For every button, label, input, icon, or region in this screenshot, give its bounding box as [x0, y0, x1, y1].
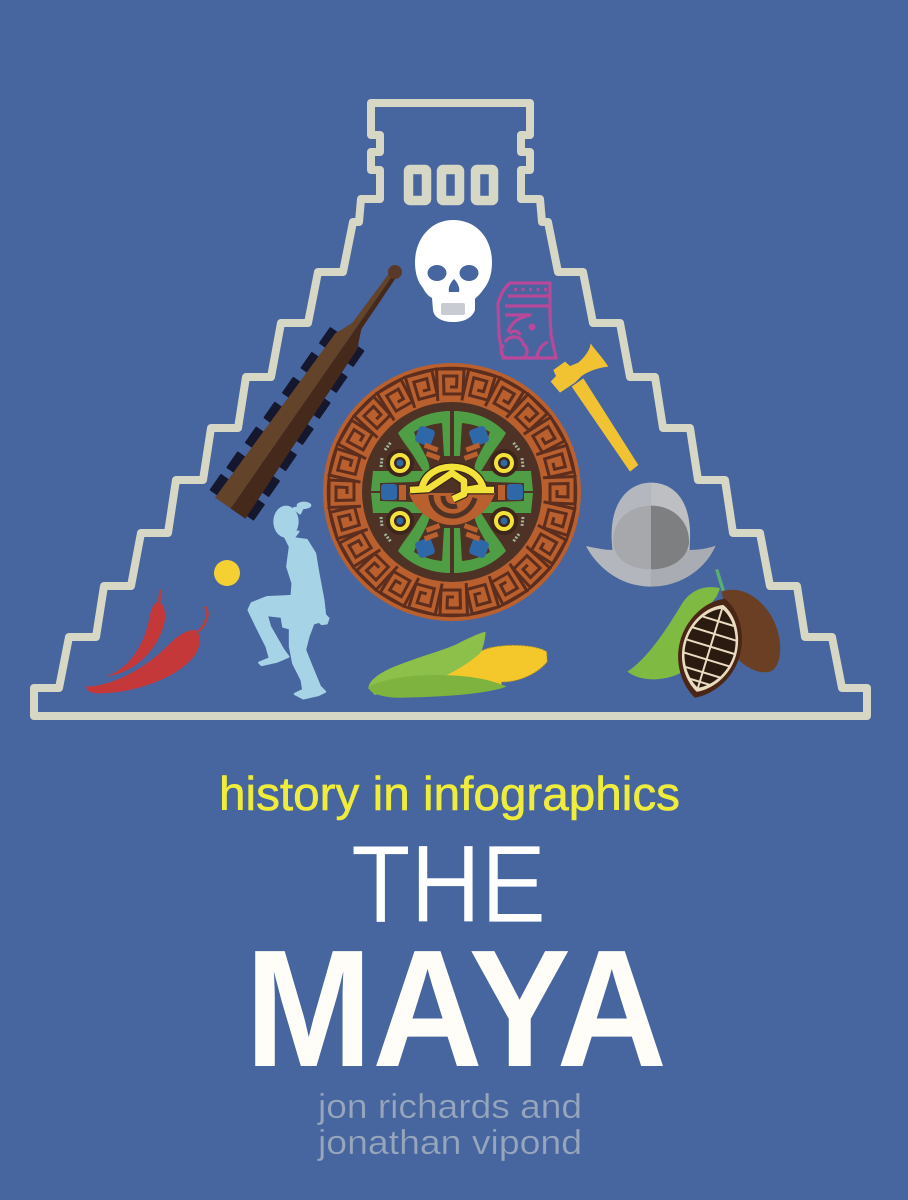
- ring with key pattern: [323, 363, 581, 621]
- medallion: [323, 363, 581, 621]
- authors: jonathan vipond: [317, 1124, 582, 1162]
- club spikes: [209, 323, 370, 521]
- authors: jon richards and: [317, 1088, 582, 1126]
- icon: skull: [415, 220, 492, 322]
- icon: war club: [208, 250, 420, 523]
- icon: ball: [214, 560, 240, 586]
- title: MAYA: MAYA: [245, 916, 667, 1102]
- icon: corn: [368, 632, 547, 698]
- title: THE: THE: [351, 823, 546, 946]
- icon: maya glyph: [498, 283, 556, 358]
- icon: chilli peppers: [86, 589, 207, 693]
- centre motif: [409, 467, 495, 525]
- authors: [317, 1088, 582, 1162]
- pyramid outline: [34, 103, 867, 716]
- icon: cacao pod: [627, 569, 780, 707]
- green quadrants: [371, 411, 533, 573]
- icon: conquistador helmet: [586, 483, 716, 587]
- icon: ball player silhouette: [249, 502, 328, 698]
- series title: history in infographics: [219, 767, 680, 820]
- icon: axe: [551, 343, 638, 472]
